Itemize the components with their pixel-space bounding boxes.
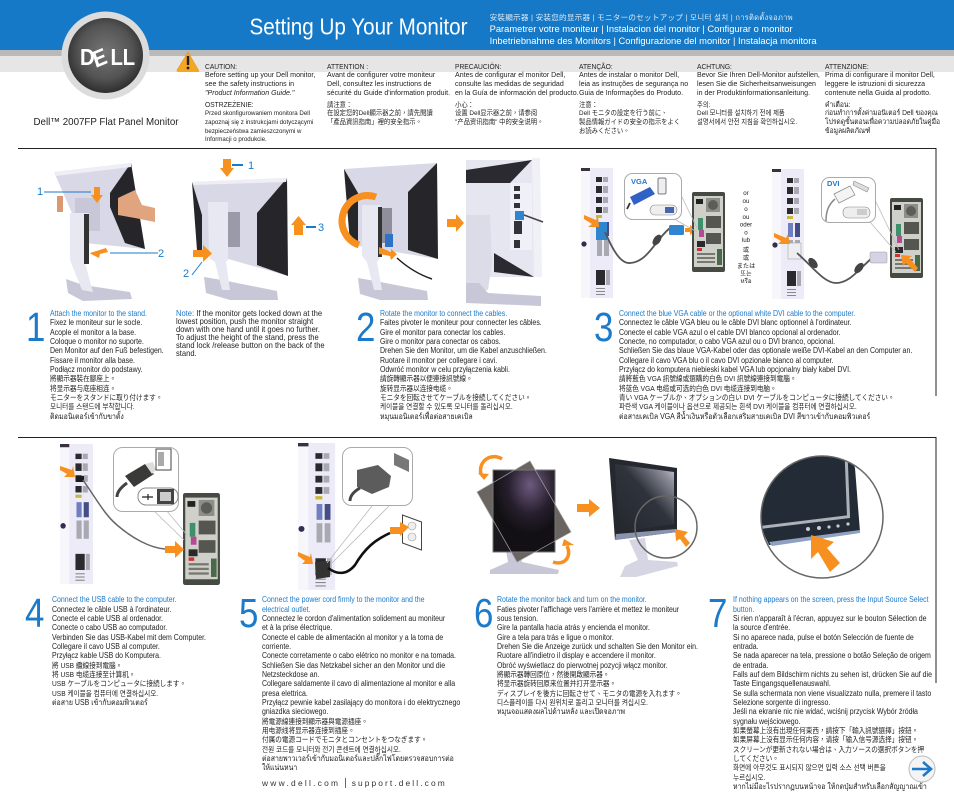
- step 7 text: Si no aparece nada, pulse el botón Selección de fuente de: [733, 633, 913, 642]
- illustration: attach monitor to stand: 1: [37, 186, 43, 198]
- illustration: DVI cable connection: DVI: [827, 179, 840, 188]
- step 5 text: Connect the power cord firmly to the monitor and the: [262, 595, 424, 604]
- step 7 text: してください。: [733, 754, 779, 763]
- step 2 text: 請旋轉顯示器以便連接訊號線。: [380, 374, 472, 383]
- step 3 text: ต่อสายเคเบิล VGA สีน้ำเงินหรือตัวเลือกเสริมสายเคเบิล DVI สีขาวเข้ากับคอมพิวเตอร์: [619, 412, 870, 421]
- step 3 text: 파란색 VGA 케이블이나 옵션으로 제공되는 흰색 DVI 케이블을 컴퓨터에 연결하십시오.: [619, 402, 856, 411]
- step 7 text: entrada.: [733, 642, 758, 651]
- note text: stand lock /release button on the back of the: [176, 341, 324, 350]
- step 7 text: Selezione sorgente di ingresso.: [733, 698, 830, 707]
- step 6 number: 6: [474, 590, 493, 636]
- frame lines: upper row: [18, 148, 936, 683]
- caution text: Italian and Thai: โปรดดูขั้นตอนเพื่อความปลอดภัยในคู่มือ: [825, 117, 940, 126]
- step 2 text: Faites pivoter le moniteur pour connecter les câbles.: [380, 318, 541, 327]
- step 7 text: If nothing appears on the screen, press the Input Source Select: [733, 595, 928, 604]
- caution text: Spanish and Simplified Chinese: PRECAUCIÓN:: [455, 62, 501, 71]
- step 6 text: Obróć wyświetlacz do pierwotnej pozycji włącz monitor.: [497, 661, 668, 670]
- step 2 text: 旋转显示器以连接电缆。: [380, 384, 452, 393]
- step 5 text: Conecte corretamente o cabo elétrico no monitor e na tomada.: [262, 651, 456, 660]
- step 2 text: モニタを回転させてケーブルを接続してください。: [380, 393, 531, 402]
- step 7 text: de entrada.: [733, 661, 768, 670]
- step 2 text: Ruotare il monitor per collegare i cavi.: [380, 356, 497, 365]
- multilingual title lines: [490, 12, 817, 47]
- step 3 text: 将蓝色 VGA 电缆或可选的白色 DVI 电缆连接到电脑。: [619, 384, 776, 393]
- step 6 text: หมุนจอแสดงผลไปด้านหลัง และเปิดจอภาพ: [497, 707, 625, 716]
- website footer: www.dell.com: [261, 778, 338, 788]
- illustration: locked stand height adjustment: 2: [183, 268, 189, 280]
- illustration: USB cable connection: [60, 444, 220, 585]
- caution text: German and Korean: ACHTUNG:: [697, 62, 732, 71]
- caution text: Italian and Thai: ATTENZIONE:: [825, 62, 868, 71]
- caution text: German and Korean: Dell 모니터를 설치하기 전에 제품: [697, 110, 784, 117]
- illustration: power cord connection: [298, 443, 422, 590]
- step 5 text: Przyłącz pewnie kabel zasilający do monitora i do elektrycznego: [262, 698, 460, 707]
- step 3 text: 請將藍色 VGA 訊號線或選購的白色 DVI 訊號線連接到電腦。: [619, 374, 796, 383]
- note text: lowest position, push the monitor straight: [176, 317, 313, 326]
- step 1 number: 1: [26, 304, 45, 350]
- caution text: English and Polish: "Product Information Guide." OSTRZEŻENIE:: [205, 88, 294, 109]
- step 5 text: 付属の電源コードでモニタとコンセントをつなぎます。: [262, 735, 427, 744]
- caution text: Italian and Thai: contenute nella Guida al prodotto. คำเตือน:: [825, 88, 931, 109]
- step 4 text: Verbinden Sie das USB-Kabel mit dem Computer.: [52, 633, 206, 642]
- note text: [176, 309, 324, 358]
- step 7 text: หากไม่มีอะไรปรากฏบนหน้าจอ ให้กดปุ่มสำหรับเลือกสัญญาณเข้า: [733, 782, 926, 791]
- caution text: Portuguese and Japanese: 製品情報ガイドの安全の指示をよく: [579, 119, 680, 126]
- step 5 text: electrical outlet.: [262, 605, 310, 614]
- caution text: Spanish and Simplified Chinese: 设置 Dell显示器之前，请参阅: [455, 110, 537, 117]
- step 5 text: ให้แน่นหนา: [262, 763, 297, 772]
- step 5 text: Schließen Sie das Netzkabel sicher an den Monitor und die: [262, 661, 445, 670]
- step 5 text: gniazdka sieciowego.: [262, 707, 328, 716]
- caution text: English and Polish: CAUTION:: [205, 62, 237, 71]
- step 4 text: Collegare il cavo USB al computer.: [52, 642, 160, 651]
- step 2 text: [380, 309, 546, 421]
- step 5 text: Conecte el cable de alimentación al monitor y a la toma de: [262, 633, 443, 642]
- step 4 text: Connect the USB cable to the computer.: [52, 595, 176, 604]
- caution text: French and Traditional Chinese: Avant de configurer votre moniteur: [327, 70, 435, 79]
- step 4 number: 4: [24, 590, 44, 636]
- step 2 text: หมุนมอนิเตอร์เพื่อต่อสายเคเบิล: [380, 412, 472, 421]
- step 7 text: Taste Eingangsquellenauswahl.: [733, 679, 830, 688]
- step 4 text: 将 USB 电缆连接至计算机。: [52, 670, 135, 679]
- illustration: locked stand height adjustment: [183, 159, 324, 300]
- step 5 number: 5: [239, 590, 258, 636]
- caution text: Portuguese and Japanese: [579, 62, 688, 135]
- icon: warning triangle: [177, 52, 199, 72]
- caution text: Italian and Thai: ข้อมูลผลิตภัณฑ์: [825, 126, 870, 135]
- caution text: German and Korean: [697, 62, 820, 126]
- step 6 text: 将显示器旋转回原来位置并打开显示器。: [497, 679, 616, 688]
- or text in all languages: 或: [743, 246, 749, 254]
- multilingual title lines: 安裝顯示器 | 安装您的显示器 | モニターのセットアップ | 모니터 설치 | การติดตั้งจอภาพ: [490, 12, 793, 22]
- step 7 text: Se sulla schermata non viene visualizzato nulla, premere il tasto: [733, 689, 931, 698]
- caution text: Italian and Thai: leggere le istruzioni di sicurezza: [825, 79, 925, 88]
- caution text: English and Polish: Przed skonfigurowaniem monitora Dell: [205, 110, 310, 117]
- illustration: attach monitor to stand: 2: [158, 248, 164, 260]
- or text in all languages: 或: [743, 254, 749, 262]
- step 3 text: Conecte, no computador, o cabo VGA azul ou o DVI branco, opcional.: [619, 337, 835, 346]
- step 6 text: Ruotare all'indietro il display e accendere il monitor.: [497, 651, 656, 660]
- illustration: input source button magnified: [760, 455, 884, 579]
- step 5 text: 전원 코드를 모니터와 전기 콘센트에 연결하십시오.: [262, 745, 401, 754]
- step 3 text: Connect the blue VGA cable or the optional white DVI cable to the computer.: [619, 309, 855, 318]
- step 3 text: Conecte el cable VGA azul o el cable DVI blanco opcional al ordenador.: [619, 328, 840, 337]
- step 4 text: Conecte el cable USB al ordenador.: [52, 614, 163, 623]
- step 3 number: 3: [594, 304, 613, 350]
- step 7 text: sygnału wejściowego.: [733, 717, 800, 726]
- or text in all languages: or: [743, 190, 749, 197]
- step 4 text: Przyłącz kable USB do Komputera.: [52, 651, 161, 660]
- caution text: Spanish and Simplified Chinese: consulte las medidas de seguridad: [455, 79, 564, 88]
- step 5 text: 將電源線連接到顯示器與電源插座。: [262, 717, 368, 726]
- step 1 text: Podłącz monitor do podstawy.: [50, 365, 142, 374]
- step 1 text: Fissare il monitor alla base.: [50, 356, 134, 365]
- caution text: French and Traditional Chinese: 在設定您的Dell顯示器之前，請先閱讀: [327, 110, 433, 117]
- multilingual title lines: Parametrer votre moniteur | Instalacion del monitor | Configurar o monitor: [490, 24, 793, 35]
- step 1 text: Fixez le moniteur sur le socle.: [50, 318, 142, 327]
- icon: next arrow: [909, 756, 935, 782]
- step 4 text: USB ケーブルをコンピュータに接続します。: [52, 679, 186, 688]
- note text: down with one hand until it goes no further.: [176, 325, 319, 334]
- Dell logo: DELL: [80, 43, 135, 73]
- illustration: rotate monitor back and power on: [477, 457, 697, 577]
- caution text: German and Korean: lesen Sie die Sicherheitsanweisungen: [697, 79, 816, 88]
- step 1 text: Attach the monitor to the stand.: [50, 309, 146, 318]
- caution text: Portuguese and Japanese: Dell モニタの設定を行う前に、: [579, 110, 668, 117]
- or text in all languages: [737, 190, 755, 285]
- or text in all languages: または: [737, 263, 755, 270]
- step 6 text: 디스플레이를 다시 원위치로 돌리고 모니터를 켜십시오.: [497, 698, 648, 707]
- or text in all languages: lub: [742, 237, 751, 244]
- step 4 text: Connectez le câble USB à l'ordinateur.: [52, 605, 171, 614]
- step 6 text: 將顯示器轉回原位，然後開啟顯示器。: [497, 670, 609, 679]
- caution text: Portuguese and Japanese: お読みください。: [579, 128, 630, 135]
- step 2 text: Rotate the monitor to connect the cables.: [380, 309, 507, 318]
- note text: To adjust the height of the stand, press the: [176, 333, 318, 342]
- caution text: German and Korean: in der Produktinformationsanleitung. 주의:: [697, 88, 810, 109]
- illustration: rotated monitor with ports: [466, 158, 543, 306]
- caution text: French and Traditional Chinese: ATTENTION :: [327, 62, 368, 71]
- caution text: Italian and Thai: Prima di configurare il monitor Dell,: [825, 70, 935, 79]
- or text in all languages: ou: [743, 198, 750, 205]
- step 7 text: 누르십시오.: [733, 773, 765, 782]
- step 2 text: 케이블을 연결할 수 있도록 모니터를 돌리십시오.: [380, 402, 512, 411]
- step 7 text: 화면에 아무것도 표시되지 않으면 입력 소스 선택 버튼을: [733, 763, 886, 772]
- caution text: Portuguese and Japanese: leia as instruções de segurança no: [579, 79, 688, 88]
- caution text: Portuguese and Japanese: Guia de Informações do Produto. 注意：: [579, 88, 683, 109]
- or text in all languages: oder: [740, 222, 752, 228]
- step 1 text: Acople el monitor a la base.: [50, 328, 136, 337]
- step 5 text: Connectez le cordon d'alimentation solidement au moniteur: [262, 614, 445, 623]
- caution text: Spanish and Simplified Chinese: [455, 62, 579, 126]
- step 7 number: 7: [708, 590, 727, 636]
- step 6 text: sous tension.: [497, 614, 538, 623]
- illustration: attach monitor to stand: [37, 163, 164, 301]
- step 4 text: USB 케이블을 컴퓨터에 연결하십시오.: [52, 689, 158, 698]
- caution text: Spanish and Simplified Chinese: en la Guía de información del producto. 小心：: [455, 88, 579, 109]
- step 4 text: [52, 595, 206, 707]
- product name: Dell™ 2007FP Flat Panel Monitor: [34, 117, 179, 128]
- illustration: VGA cable connection: VGA: [631, 177, 648, 186]
- step 3 text: Collegare il cavo VGA blu o il cavo DVI opzionale bianco al computer.: [619, 356, 833, 365]
- caution text: Spanish and Simplified Chinese: "产品资讯指南" 中的安全说明。: [455, 119, 543, 126]
- step 7 text: Si rien n'apparaît à l'écran, appuyez sur le bouton Sélection de: [733, 614, 926, 623]
- step 3 text: Przyłącz do komputera niebieski kabel VGA lub opcjonalny biały kabel DVI.: [619, 365, 851, 374]
- step 1 text: Coloque o monitor no suporte.: [50, 337, 143, 346]
- note text: stand.: [176, 349, 196, 358]
- caution text: English and Polish: bezpieczeństwa zamieszczonymi w: [205, 128, 301, 135]
- or text in all languages: o: [744, 206, 748, 213]
- step 3 text: Connectez le câble VGA bleu ou le câble DVI blanc optionnel à l'ordinateur.: [619, 318, 851, 327]
- illustration: DVI cable connection: [772, 169, 923, 299]
- step 7 text: Falls auf dem Bildschirm nichts zu sehen ist, drücken Sie auf die: [733, 670, 932, 679]
- step 6 text: [497, 595, 698, 716]
- caution text: English and Polish: Before setting up your Dell monitor,: [205, 70, 315, 79]
- step 3 text: Schließen Sie das blaue VGA-Kabel oder das optionale weiße DVI-Kabel an den Computer an.: [619, 346, 912, 355]
- caution text: French and Traditional Chinese: 「產品資訊指南」裡的安全指示。: [327, 119, 422, 126]
- step 7 text: 如果螢幕上沒有出現任何東西，請按下「輸入訊號選擇」按鈕。: [733, 726, 918, 735]
- note text: Note: If the monitor gets locked down at the: [176, 309, 322, 318]
- or text in all languages: ou: [743, 214, 750, 221]
- website footer: support.dell.com: [352, 778, 445, 788]
- step 5 text: [262, 595, 460, 772]
- caution text: English and Polish: Informacji o produkcie.: [205, 136, 267, 143]
- step 3 text: [619, 309, 912, 421]
- step 1 text: ติดมอนิเตอร์เข้ากับขาตั้ง: [50, 412, 123, 421]
- step 1 text: 将显示器与底座相连。: [50, 384, 116, 393]
- illustration: locked stand height adjustment: 3: [318, 222, 324, 234]
- website footer: [261, 778, 445, 788]
- step 6 text: Rotate the monitor back and turn on the monitor.: [497, 595, 647, 604]
- step 2 text: Odwróć monitor w celu przyłączenia kabli.: [380, 365, 509, 374]
- illustration: rotate monitor and connect cables: [342, 163, 464, 300]
- caution text: French and Traditional Chinese: sécurité du Guide d'information produit. 請注意：: [327, 88, 450, 109]
- step 4 text: 將 USB 纜線接到電腦。: [52, 661, 122, 670]
- caution text: Portuguese and Japanese: Antes de instalar o monitor Dell,: [579, 70, 679, 79]
- step 5 text: Netzsteckdose an.: [262, 670, 319, 679]
- illustration: VGA cable connection: [581, 168, 725, 298]
- step 5 text: ต่อสายพาวเวอร์เข้ากับมอนิเตอร์และปลั๊กไฟโดยตรวจสอบการต่อ: [262, 754, 454, 763]
- step 7 text: [733, 595, 932, 791]
- step 5 text: corriente.: [262, 642, 291, 651]
- step 2 text: Drehen Sie den Monitor, um die Kabel anzuschließen.: [380, 346, 546, 355]
- step 1 text: Den Monitor auf den Fuß befestigen.: [50, 346, 163, 355]
- caution text: English and Polish: [205, 62, 315, 143]
- or text in all languages: o: [744, 230, 748, 236]
- or text in all languages: 또는: [740, 270, 752, 278]
- Dell logo: [62, 12, 150, 100]
- step 7 text: la source d'entrée.: [733, 623, 790, 632]
- step 2 number: 2: [356, 304, 375, 350]
- illustration: locked stand height adjustment: 1: [248, 160, 254, 172]
- caution text: Portuguese and Japanese: ATENÇÃO:: [579, 62, 613, 71]
- caution text: English and Polish: zapoznaj się z instrukcjami dotyczącymi: [205, 119, 313, 126]
- step 7 text: 如果屏幕上没有显示任何内容，请按「输入信号源选择」按钮。: [733, 735, 918, 744]
- step 7 text: button.: [733, 605, 754, 614]
- caution text: French and Traditional Chinese: Dell, consultez les instructions de: [327, 79, 431, 88]
- caution text: English and Polish: see the safety instructions in: [205, 79, 294, 88]
- step 5 text: 用电源线将显示器连接到插座。: [262, 726, 354, 735]
- step 3 text: 青い VGA ケーブルか、オプションの白い DVI ケーブルをコンピュータに接続してください。: [619, 393, 894, 402]
- step 6 text: Faties pivoter l'affichage vers l'arrière et mettez le moniteur: [497, 605, 679, 614]
- or text in all languages: หรือ: [740, 277, 752, 285]
- step 6 text: Gire la pantalla hacia atrás y encienda el monitor.: [497, 623, 650, 632]
- caution text: German and Korean: 설명서에서 안전 지침을 확인하십시오.: [697, 119, 797, 126]
- step 4 text: ต่อสาย USB เข้ากับคอมพิวเตอร์: [52, 698, 147, 707]
- caution text: German and Korean: Bevor Sie Ihren Dell-Monitor aufstellen,: [697, 70, 820, 79]
- step 2 text: Gire o monitor para conectar os cabos.: [380, 337, 500, 346]
- step 1 text: 모니터를 스탠드에 부착합니다.: [50, 402, 134, 411]
- step 1 text: モニターをスタンドに取り付けます。: [50, 393, 162, 402]
- step 1 text: [50, 309, 164, 421]
- step 5 text: et à la prise électrique.: [262, 623, 332, 632]
- step 1 text: 將顯示器裝在腳座上。: [50, 374, 116, 383]
- step 7 text: スクリーンが更新されない場合は、入力ソースの選択ボタンを押: [733, 745, 924, 754]
- title: Setting Up Your Monitor: [250, 14, 468, 40]
- step 2 text: Gire el monitor para conectar los cables.: [380, 328, 505, 337]
- step 7 text: Jeśli na ekranie nic nie widać, wciśnij przycisk Wybór źródła: [733, 707, 918, 716]
- caution text: Italian and Thai: ก่อนทำการตั้งค่ามอนิเตอร์ Dell ของคุณ: [825, 108, 938, 117]
- caution text: Spanish and Simplified Chinese: Antes de configurar el monitor Dell,: [455, 70, 565, 79]
- step 6 text: Gire a tela para trás e ligue o monitor.: [497, 633, 614, 642]
- caution text: Italian and Thai: [825, 62, 940, 135]
- step 4 text: Conecte o cabo USB ao computador.: [52, 623, 167, 632]
- step 7 text: Se nada aparecer na tela, pressione o botão Seleção de origem: [733, 651, 931, 660]
- multilingual title lines: Inbetriebnahme des Monitors | Configurazione del monitor | Instalacja monitora: [490, 36, 817, 47]
- step 6 text: ディスプレイを後方に回転させて、モニタの電源を入れます。: [497, 689, 682, 698]
- step 5 text: presa elettrica.: [262, 689, 307, 698]
- header band: [0, 0, 954, 72]
- step 5 text: Collegare saldamente il cavo di alimentazione al monitor e alla: [262, 679, 455, 688]
- step 6 text: Drehen Sie die Anzeige zurück und schalten Sie den Monitor ein.: [497, 642, 698, 651]
- caution text: French and Traditional Chinese: [327, 62, 450, 126]
